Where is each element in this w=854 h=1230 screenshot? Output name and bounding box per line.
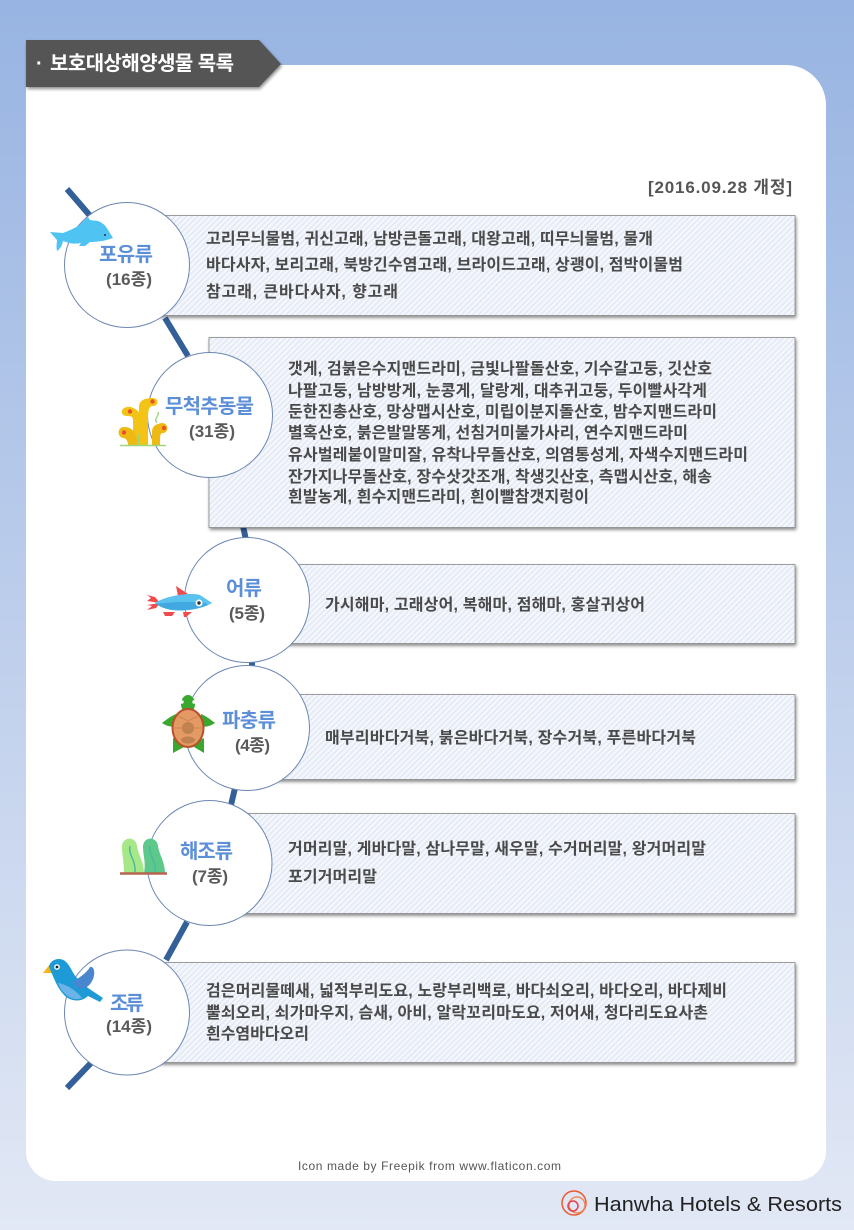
logo: Hanwha Hotels & Resorts: Hanwha Hotels & Resorts xyxy=(594,1194,842,1216)
panel: 조류 species: 검은머리물떼새, 넓적부리도요, 노랑부리백로, 바다쇠오리, 바다오리, 바다제비 xyxy=(206,982,727,1000)
title tab xyxy=(26,40,281,87)
icon: bird xyxy=(43,959,103,1002)
circle: 해조류 xyxy=(147,800,272,926)
panel: 무척추동물 species: 유사벌레붙이말미잘, 유착나무돌산호, 의염통성게, 자색수지맨드라미 xyxy=(288,446,748,464)
circle: 어류: 어류 xyxy=(226,577,262,600)
circle: 파충류: (4종) xyxy=(235,736,270,755)
circle: 포유류: 포유류 xyxy=(99,244,153,266)
panel: 무척추동물 species: 나팔고둥, 남방방게, 눈콩게, 달랑게, 대추귀고둥, 두이빨사각게 xyxy=(288,382,707,400)
panel: 포유류 species: 참고래, 큰바다사자, 향고래 xyxy=(206,283,398,301)
circle: 포유류: (16종) xyxy=(106,270,152,289)
circle: 해조류: (7종) xyxy=(192,867,228,886)
circle: 조류 xyxy=(64,950,190,1075)
circle: 무척추동물: 무척추동물 xyxy=(165,395,254,418)
circle: 어류: (5종) xyxy=(229,604,265,623)
panel: 어류 species: 가시해마, 고래상어, 복해마, 점해마, 홍살귀상어 xyxy=(325,596,645,614)
panel: 조류 species: 뿔쇠오리, 쇠가마우지, 슴새, 아비, 알락꼬리마도요, 저어새, 청다리도요사촌 xyxy=(206,1004,708,1022)
panel: 해조류 species: 거머리말, 게바다말, 삼나무말, 새우말, 수거머리말, 왕거머리말 xyxy=(288,840,706,858)
revision date: [2016.09.28 개정] xyxy=(648,178,792,197)
panel: 포유류 species: 고리무늬물범, 귀신고래, 남방큰돌고래, 대왕고래, 띠무늬물범, 물개 xyxy=(206,230,653,248)
panel: 무척추동물 species: 둔한진총산호, 망상맵시산호, 미립이분지돌산호, 밤수지맨드라미 xyxy=(288,403,717,421)
icon credit: Icon made by Freepik from www.flaticon.com xyxy=(298,1159,561,1173)
timeline line xyxy=(67,189,252,1088)
panel: 파충류 species: 매부리바다거북, 붉은바다거북, 장수거북, 푸른바다거북 xyxy=(325,729,696,747)
circle: 무척추동물: (31종) xyxy=(189,422,235,441)
panel: 무척추동물 species: 잔가지나무돌산호, 장수삿갓조개, 착생깃산호, 측맵시산호, 해송 xyxy=(288,468,712,486)
panel: 해조류 species: 포기거머리말 xyxy=(288,868,377,886)
circle: 조류: (14종) xyxy=(106,1017,152,1036)
icon: coral xyxy=(119,398,167,446)
title tab: 보호대상해양생물 목록 xyxy=(50,52,234,75)
icon: fish xyxy=(147,586,212,617)
icon: seaweed xyxy=(120,839,167,874)
panel: 무척추동물 species xyxy=(209,338,795,528)
circle: 무척추동물 xyxy=(148,352,272,478)
circle: 해조류: 해조류 xyxy=(180,840,233,863)
circle: 조류: 조류 xyxy=(110,993,144,1015)
panel: 조류 species: 흰수염바다오리 xyxy=(206,1025,309,1043)
panel: 해조류 species xyxy=(220,814,795,914)
icon: turtle xyxy=(162,695,215,753)
panel: 포유류 species: 바다사자, 보리고래, 북방긴수염고래, 브라이드고래, 상괭이, 점박이물범 xyxy=(206,256,683,274)
circle: 파충류: 파충류 xyxy=(222,709,276,732)
circle: 파충류 xyxy=(184,666,310,790)
circle: 어류 xyxy=(184,538,310,662)
panel: 무척추동물 species: 별혹산호, 붉은발말똥게, 선침거미불가사리, 연수지맨드라미 xyxy=(288,424,688,442)
panel: 무척추동물 species: 갯게, 검붉은수지맨드라미, 금빛나팔돌산호, 기수갈고둥, 깃산호 xyxy=(288,360,712,378)
panel: 조류 species xyxy=(130,962,795,1062)
panel: 무척추동물 species: 흰발농게, 흰수지맨드라미, 흰이빨참갯지렁이 xyxy=(288,488,589,506)
icon: dolphin xyxy=(50,217,113,251)
title tab: · xyxy=(36,53,43,75)
panel: 포유류 species xyxy=(130,216,795,316)
panel: 파충류 species xyxy=(260,694,795,780)
panel: 어류 species xyxy=(260,564,795,644)
circle: 포유류 xyxy=(64,202,190,328)
